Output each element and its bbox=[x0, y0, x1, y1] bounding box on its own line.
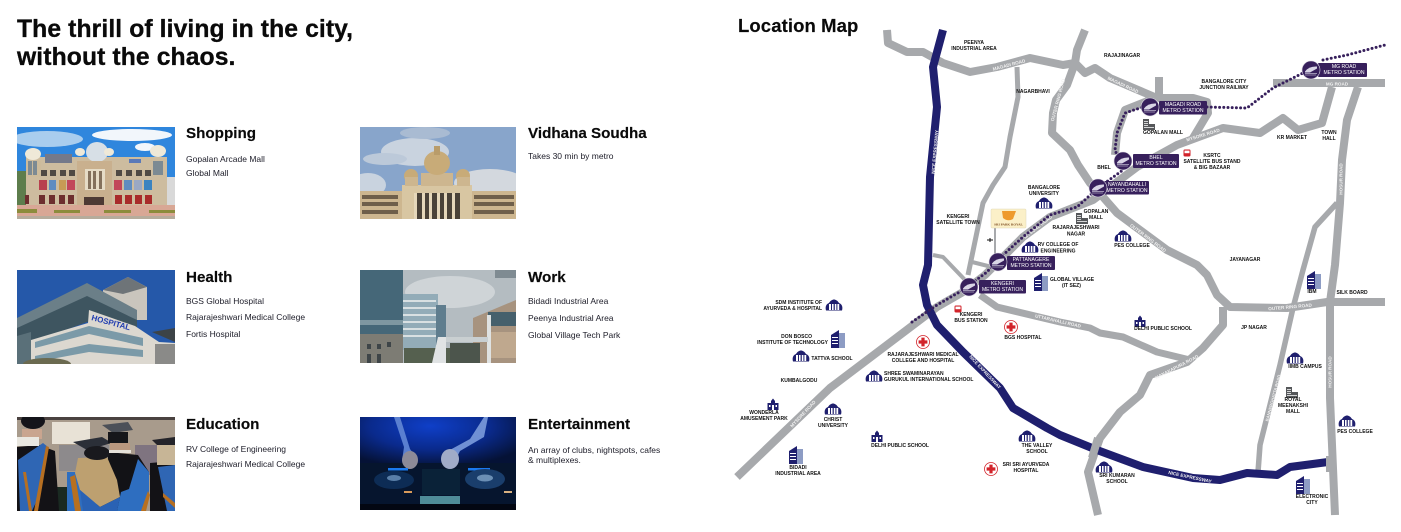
panel: shopping bbox=[17, 125, 265, 219]
place: gopalan mall (nayandahalli): MALL bbox=[1089, 215, 1103, 221]
place: royal meenakshi mall: MALL bbox=[1286, 409, 1300, 415]
title: without the chaos. bbox=[17, 44, 236, 71]
list: work: Peenya Industrial Area bbox=[528, 313, 614, 323]
list: health: BGS Global Hospital bbox=[186, 296, 264, 306]
place: christ university: CHRIST bbox=[824, 417, 842, 423]
label: silk board: SILK BOARD bbox=[1336, 290, 1368, 296]
photo: hospital bbox=[17, 270, 175, 364]
photo: dj decks bbox=[360, 417, 516, 510]
place: pes college: PES COLLEGE bbox=[1114, 243, 1150, 249]
place: pes college south: PES COLLEGE bbox=[1337, 429, 1373, 435]
place: iimb campus bbox=[1287, 352, 1322, 370]
place: christ university: UNIVERSITY bbox=[818, 423, 849, 429]
place labels bbox=[781, 40, 1368, 384]
place: rajarajeshwari medical college bbox=[887, 336, 959, 364]
place: sri kumaran school: SRI KUMARAN bbox=[1099, 473, 1135, 479]
place: shree swaminarayan: SHREE SWAMINARAYAN bbox=[884, 371, 944, 377]
place: gopalan mall (nayandahalli) bbox=[1076, 209, 1109, 224]
label: jayanagar: JAYANAGAR bbox=[1230, 257, 1261, 263]
place: don bosco: INSTITUTE OF TECHNOLOGY bbox=[757, 340, 829, 346]
road: local links bbox=[933, 255, 992, 282]
place: royal meenakshi mall: MEENAKSHI bbox=[1278, 403, 1309, 409]
label: bangalore city junction railway: BANGALORE CITY bbox=[1202, 79, 1246, 85]
place: electronic city: ELECTRONIC bbox=[1296, 494, 1328, 500]
place: delhi public school west bbox=[871, 430, 929, 449]
place: pes college south bbox=[1337, 416, 1373, 435]
place: the valley school: THE VALLEY bbox=[1022, 443, 1052, 449]
place: rv college of engineering bbox=[1022, 242, 1078, 254]
place: kengeri bus station bbox=[954, 306, 988, 324]
place: global village: GLOBAL VILLAGE bbox=[1050, 277, 1094, 283]
place: global village bbox=[1034, 273, 1095, 291]
place: global village: (IT SEZ) bbox=[1062, 283, 1081, 289]
place: electronic city bbox=[1296, 476, 1329, 506]
list: shopping: Gopalan Arcade Mall bbox=[186, 154, 265, 164]
metro station: nayandahalli: METRO STATION bbox=[1106, 188, 1148, 194]
place: bgs hospital: BGS HOSPITAL bbox=[1004, 335, 1042, 341]
place: shree swaminarayan: GURUKUL INTERNATIONAL SCHOOL bbox=[884, 377, 973, 383]
place: royal meenakshi mall bbox=[1278, 387, 1309, 415]
place: don bosco bbox=[757, 330, 845, 348]
label: town hall: HALL bbox=[1322, 136, 1336, 142]
road labels bbox=[789, 58, 1349, 484]
road labels: MYSORE ROAD bbox=[1186, 127, 1221, 142]
place: iimb campus: IIMB CAMPUS bbox=[1288, 364, 1322, 370]
road: hosur crossing bbox=[1326, 456, 1334, 472]
project logo: sri park royal bbox=[991, 209, 1026, 228]
list: health: Fortis Hospital bbox=[186, 329, 240, 339]
place: sdm institute: AYURVEDA & HOSPITAL bbox=[763, 306, 822, 312]
place: bangalore university: BANGALORE bbox=[1028, 185, 1060, 191]
metro station: kengeri: METRO STATION bbox=[982, 287, 1023, 293]
place: bangalore university bbox=[1028, 185, 1061, 208]
photo: graduates bbox=[17, 417, 175, 511]
metro line bbox=[912, 45, 1385, 322]
road labels: OUTER RING ROAD bbox=[1268, 303, 1313, 311]
label: kumbalgodu: KUMBALGODU bbox=[781, 378, 818, 384]
label: rajajinagar: RAJAJINAGAR bbox=[1104, 53, 1140, 59]
label: jp nagar: JP NAGAR bbox=[1241, 325, 1267, 331]
place: rv college of engineering: RV COLLEGE OF bbox=[1038, 242, 1078, 248]
label: kr market: KR MARKET bbox=[1277, 135, 1307, 141]
road labels: MAGADI ROAD bbox=[1107, 76, 1140, 95]
place: gopalan mall (magadi) bbox=[1143, 119, 1183, 136]
text: entertainment: An array of clubs, nightspots, cafes bbox=[528, 445, 660, 455]
place: rv college of engineering: ENGINEERING bbox=[1040, 248, 1076, 254]
heading: work: Work bbox=[528, 269, 566, 286]
photo: business district bbox=[360, 270, 516, 363]
label: town hall: TOWN bbox=[1321, 130, 1337, 136]
heading: health: Health bbox=[186, 269, 232, 286]
place: kengeri bus station: KENGERI bbox=[960, 312, 982, 318]
road: uttarahalli road bbox=[980, 295, 1190, 360]
place: gopalan mall (nayandahalli): GOPALAN bbox=[1084, 209, 1108, 215]
place: ibm: IBM bbox=[1307, 289, 1317, 295]
panel: work bbox=[360, 269, 620, 363]
place: don bosco: DON BOSCO bbox=[781, 334, 812, 340]
metro station: magadi road: METRO STATION bbox=[1162, 108, 1204, 114]
list: education bbox=[186, 444, 305, 469]
road: magadi loop bbox=[1115, 77, 1208, 155]
metro station: mg road bbox=[1302, 61, 1367, 79]
place: sri sri ayurveda hospital: HOSPITAL bbox=[1014, 468, 1038, 474]
metro station: bhel: METRO STATION bbox=[1135, 161, 1177, 167]
place: sri kumaran school bbox=[1096, 462, 1135, 485]
metro station: kengeri: KENGERI bbox=[991, 281, 1014, 287]
road labels: NICE EXPRESSWAY bbox=[968, 354, 1002, 390]
place: bgs hospital bbox=[1004, 320, 1042, 341]
road: bannerghatta road bbox=[1258, 203, 1337, 472]
road: north link and outer ring road bbox=[1052, 30, 1385, 308]
metro station: pattanagere: PATTANAGERE bbox=[1013, 257, 1050, 263]
label: nagarbhavi: NAGARBHAVI bbox=[1016, 89, 1050, 95]
metro station: nayandahalli bbox=[1089, 179, 1149, 197]
panel: health bbox=[17, 269, 305, 364]
place: wonderla: WONDERLA bbox=[749, 410, 779, 416]
place: delhi public school east: DELHI PUBLIC SCHOOL bbox=[1134, 326, 1192, 332]
road labels: MG ROAD bbox=[1326, 82, 1349, 86]
place: kengeri bus station: BUS STATION bbox=[954, 318, 988, 324]
place: shree swaminarayan bbox=[866, 370, 973, 383]
place: wonderla bbox=[740, 398, 788, 422]
place: bangalore university: UNIVERSITY bbox=[1029, 191, 1060, 197]
panel: education bbox=[17, 416, 305, 511]
list: work: Global Village Tech Park bbox=[528, 330, 620, 340]
place: electronic city: CITY bbox=[1306, 500, 1318, 506]
road: mg road bbox=[1273, 79, 1385, 87]
metro station: mg road: MG ROAD bbox=[1332, 64, 1356, 70]
metro station: pattanagere: METRO STATION bbox=[1010, 263, 1052, 269]
place: ksrtc bus stand: KSRTC bbox=[1203, 153, 1221, 159]
place: delhi public school west: DELHI PUBLIC SCHOOL bbox=[871, 443, 929, 449]
metro station: bhel bbox=[1114, 152, 1179, 170]
place: bidadi industrial area bbox=[775, 446, 821, 477]
metro station: bhel: BHEL bbox=[1149, 155, 1163, 161]
list: work: Bidadi Industrial Area bbox=[528, 296, 608, 306]
title bbox=[16, 16, 353, 71]
label: rajarajeshwari nagar: RAJARAJESHWARI bbox=[1053, 225, 1099, 231]
metro station: magadi road bbox=[1141, 98, 1207, 116]
place: gopalan mall (magadi): GOPALAN MALL bbox=[1143, 130, 1183, 136]
metro station: magadi road: MAGADI ROAD bbox=[1165, 102, 1201, 108]
label: kengeri satellite town: SATELLITE TOWN bbox=[936, 220, 980, 226]
heading: location map: Location Map bbox=[738, 15, 858, 36]
heading: shopping: Shopping bbox=[186, 125, 256, 142]
place: rajarajeshwari medical college: RAJARAJESHWARI MEDICAL bbox=[887, 352, 959, 358]
road labels: MAGADI ROAD bbox=[992, 58, 1026, 72]
heading: education: Education bbox=[186, 416, 259, 433]
place: ksrtc bus stand: & BIG BAZAAR bbox=[1194, 165, 1231, 171]
road labels: NICE EXPRESSWAY bbox=[1168, 470, 1212, 484]
place: the valley school bbox=[1019, 430, 1053, 455]
place: sri sri ayurveda hospital bbox=[984, 462, 1050, 476]
place: pes college bbox=[1114, 230, 1150, 249]
label: peenya industrial area: PEENYA bbox=[964, 40, 984, 46]
label: bangalore city junction railway: JUNCTION RAILWAY bbox=[1199, 85, 1249, 91]
place: royal meenakshi mall: ROYAL bbox=[1284, 397, 1302, 403]
project logo: sri park royal: SRI PARK ROYAL bbox=[994, 222, 1024, 226]
label: bhel: BHEL bbox=[1097, 165, 1111, 171]
roads bbox=[737, 30, 1385, 515]
text: entertainment bbox=[528, 445, 660, 465]
road: kanakapura road bbox=[1088, 307, 1223, 515]
road labels: UTTARAHALLI ROAD bbox=[1035, 313, 1082, 329]
place: wonderla: AMUSEMENT PARK bbox=[740, 416, 788, 422]
road labels: NICE EXPRESSWAY bbox=[931, 130, 939, 174]
panel: vidhana soudha bbox=[360, 125, 647, 219]
place: bidadi industrial area: BIDADI bbox=[789, 465, 807, 471]
road: nagarbhavi road bbox=[968, 67, 1018, 275]
road: magadi road bbox=[887, 30, 1157, 98]
label: kengeri satellite town: KENGERI bbox=[947, 214, 969, 220]
photo: vidhana soudha bbox=[360, 127, 516, 219]
text: vidhana soudha: Takes 30 min by metro bbox=[528, 151, 614, 161]
place: ksrtc bus stand: SATELLITE BUS STAND bbox=[1183, 159, 1241, 165]
heading: entertainment: Entertainment bbox=[528, 416, 630, 433]
label: peenya industrial area: INDUSTRIAL AREA bbox=[951, 46, 997, 52]
list: shopping: Global Mall bbox=[186, 168, 229, 178]
road labels: BANNERGHATTA ROAD bbox=[1264, 374, 1282, 422]
metro station: mg road: METRO STATION bbox=[1323, 70, 1365, 76]
list: education: Rajarajeshwari Medical College bbox=[186, 459, 305, 469]
label: rajarajeshwari nagar: NAGAR bbox=[1067, 232, 1086, 238]
place: christ university bbox=[818, 404, 849, 429]
road labels: OUTER RING ROAD bbox=[1129, 223, 1167, 254]
metro station: pattanagere bbox=[989, 253, 1055, 271]
road labels: MYSORE ROAD bbox=[1023, 214, 1054, 240]
text: entertainment: & multiplexes. bbox=[528, 455, 581, 465]
metro station: nayandahalli: NAYANDAHALLI bbox=[1108, 182, 1146, 188]
place: tattva school bbox=[793, 350, 853, 362]
place: bidadi industrial area: INDUSTRIAL AREA bbox=[775, 471, 821, 477]
road: nice expressway bbox=[923, 30, 1328, 480]
list: shopping bbox=[186, 154, 265, 178]
place: sdm institute bbox=[763, 300, 842, 312]
list: health bbox=[186, 296, 305, 339]
place: rajarajeshwari medical college: COLLEGE AND HOSPITAL bbox=[892, 358, 954, 364]
road: mysore road bbox=[737, 87, 1332, 477]
place: tattva school: TATTVA SCHOOL bbox=[811, 356, 853, 362]
road labels: HOSUR ROAD bbox=[1328, 356, 1332, 388]
road labels: HOSUR ROAD bbox=[1338, 163, 1344, 195]
list: health: Rajarajeshwari Medical College bbox=[186, 312, 305, 322]
metro station: kengeri bbox=[960, 278, 1026, 296]
photo: shopping mall bbox=[17, 127, 175, 219]
place: the valley school: SCHOOL bbox=[1026, 449, 1048, 455]
road: hosur road bbox=[1330, 87, 1358, 515]
list: education: RV College of Engineering bbox=[186, 444, 286, 454]
place: sri sri ayurveda hospital: SRI SRI AYURVEDA bbox=[1003, 462, 1049, 468]
place: sdm institute: SDM INSTITUTE OF bbox=[775, 300, 822, 306]
place: delhi public school east bbox=[1134, 316, 1192, 332]
place: ibm bbox=[1307, 271, 1321, 295]
panel: entertainment bbox=[360, 416, 660, 510]
title: The thrill of living in the city, bbox=[17, 16, 353, 43]
photo: hospital: HOSPITAL bbox=[90, 313, 131, 332]
road labels: MYSORE ROAD bbox=[789, 399, 817, 428]
place: sri kumaran school: SCHOOL bbox=[1106, 479, 1128, 485]
list: work bbox=[528, 296, 620, 340]
icon: airport plane bbox=[987, 238, 993, 242]
heading: vidhana soudha: Vidhana Soudha bbox=[528, 125, 647, 142]
road labels: OUTER RING ROAD bbox=[1050, 78, 1066, 122]
road labels: KANAKAPURA ROAD bbox=[1155, 354, 1200, 380]
place: ksrtc bus stand bbox=[1183, 150, 1241, 171]
